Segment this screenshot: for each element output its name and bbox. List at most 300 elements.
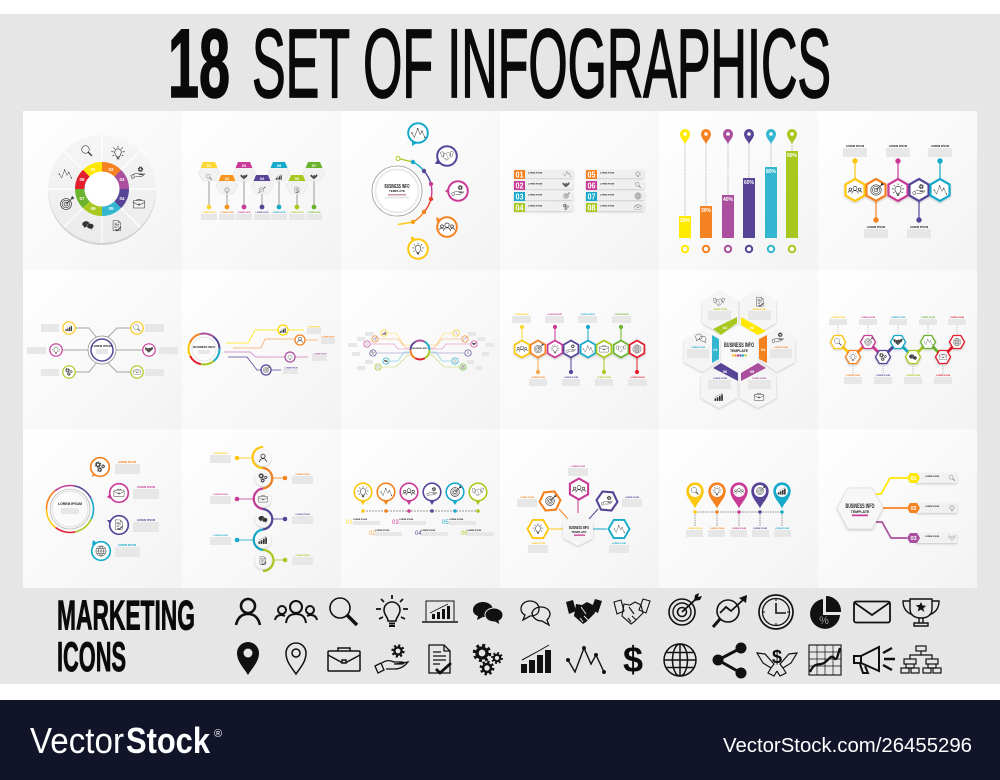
icon: hands with dollar [757, 647, 797, 676]
captions [514, 314, 645, 379]
icon: percent pie [810, 596, 841, 629]
ring numbers: 01 [90, 167, 96, 172]
text blocks [353, 521, 494, 536]
line dots [361, 509, 480, 513]
band numbers: 06 [723, 369, 728, 374]
band numbers: 03 [750, 325, 755, 330]
icon: filled chat [473, 602, 503, 625]
number badges [514, 170, 597, 212]
step numbers: 02 [369, 531, 376, 537]
panel: numbered list [500, 111, 659, 270]
panel: hexagon hub [500, 429, 659, 588]
bar values: 60% [744, 180, 755, 186]
text blocks [687, 311, 792, 389]
captions: LOREM IPSUM [688, 528, 702, 530]
centre title: BUSINESS INFO [724, 342, 754, 349]
icon: envelope [854, 602, 890, 622]
text blocks [517, 468, 642, 553]
list labels: LOREM IPSUM [528, 194, 542, 196]
captions: LOREM IPSUM [213, 453, 228, 455]
row labels: LOREM IPSUM [925, 506, 939, 508]
centre label: BUSINESS INFO [412, 348, 428, 350]
captions: LOREM IPSUM [753, 528, 767, 530]
panel: eight hexagon chain [500, 270, 659, 429]
icon: megaphone [854, 647, 895, 673]
captions: LOREM IPSUM [614, 314, 629, 316]
captions: LOREM IPSUM [867, 225, 885, 229]
bar values: 90% [787, 153, 798, 159]
captions: LOREM IPSUM [775, 528, 789, 530]
ring [188, 334, 220, 364]
centre title: TEMPLATE [730, 349, 749, 353]
list labels: LOREM IPSUM [600, 184, 614, 186]
centre circle [372, 166, 422, 216]
pin icons [691, 486, 786, 495]
captions: LOREM IPSUM [931, 144, 949, 148]
captions: LOREM IPSUM [936, 375, 950, 377]
footer logo [30, 720, 222, 761]
list labels [528, 172, 614, 208]
step numbers: 01 [346, 520, 353, 526]
captions: LOREM IPSUM [597, 377, 611, 379]
nodes [364, 330, 477, 370]
band numbers: 01 [713, 347, 718, 352]
centre circle: BUSINESS INFO [384, 184, 410, 190]
captions: LOREM IPSUM [691, 347, 705, 349]
zigzag links [838, 342, 957, 357]
axis dots [693, 510, 784, 514]
panel: bar chart [659, 111, 818, 270]
badge numbers: 07 [588, 192, 596, 202]
wheel base [48, 135, 156, 245]
list labels: LOREM IPSUM [600, 172, 614, 174]
row labels: LOREM IPSUM [925, 476, 939, 478]
satellites [50, 322, 155, 378]
badge numbers [910, 476, 917, 542]
ring text [58, 502, 82, 514]
rows [915, 473, 957, 543]
footer logo: Stock [126, 720, 211, 761]
bar values: 30% [701, 208, 712, 214]
outer hexagons [528, 478, 630, 538]
coloured bands [712, 317, 767, 381]
captions: LOREM IPSUM [861, 317, 875, 319]
centre circle: TEMPLATE [389, 189, 405, 193]
captions: LOREM IPSUM [625, 497, 639, 499]
ring numbers: 02 [108, 167, 114, 172]
captions: LOREM IPSUM [889, 144, 907, 148]
hexagon numbers [207, 163, 317, 181]
column captions: LOREM IPSUM [221, 212, 234, 214]
bubble captions: LOREM IPSUM [118, 543, 136, 547]
step labels: LOREM IPSUM [449, 519, 463, 521]
stem dots [520, 325, 639, 374]
stems [237, 458, 285, 560]
icon: handshake [566, 599, 602, 624]
icon: document check [429, 645, 451, 673]
captions: LOREM IPSUM [630, 377, 645, 379]
bar values: 40% [723, 197, 734, 203]
bubble captions: LOREM IPSUM [137, 518, 155, 522]
hexagon icons [206, 174, 318, 193]
title [168, 9, 831, 118]
captions: LOREM IPSUM [514, 314, 529, 316]
bubbles [91, 458, 128, 560]
badge numbers: 06 [588, 182, 596, 190]
number badges [907, 473, 920, 543]
captions: LOREM IPSUM [921, 317, 935, 319]
callout circles [354, 483, 487, 505]
ring numbers: 03 [119, 177, 125, 182]
badge numbers: 02 [516, 182, 524, 190]
hexagon numbers: 06 [295, 176, 300, 181]
title: 18 [168, 9, 230, 118]
hub [88, 336, 116, 364]
panel: circle with speech bubbles [23, 429, 182, 588]
captions [688, 528, 789, 530]
outer icons [533, 485, 625, 533]
captions: LOREM IPSUM [295, 474, 310, 476]
captions: LOREM IPSUM [752, 378, 766, 380]
ring numbers: 05 [108, 206, 114, 211]
badge numbers: 03 [910, 536, 917, 542]
captions [831, 317, 964, 377]
icon: gears [474, 645, 502, 674]
badge numbers: 03 [516, 192, 524, 202]
badge numbers: 01 [516, 170, 524, 180]
hexagon icons [848, 182, 947, 195]
ring numbers [79, 167, 125, 211]
row labels: LOREM IPSUM [925, 536, 939, 538]
icon: trophy [903, 599, 939, 626]
icon: light bulb [376, 595, 408, 626]
hexagon icons [834, 337, 961, 361]
text blocks [843, 148, 952, 238]
icon: filled pin [237, 642, 259, 675]
step labels: LOREM IPSUM [421, 530, 435, 532]
stems [209, 181, 314, 207]
nodes [261, 325, 305, 375]
badge numbers: 02 [910, 506, 917, 512]
column captions: LOREM IPSUM [308, 212, 321, 214]
ring numbers: 06 [90, 206, 96, 211]
bars [679, 151, 798, 238]
step numbers: 03 [392, 520, 399, 526]
captions: LOREM IPSUM [713, 309, 727, 311]
stem dots [852, 158, 943, 223]
stems [522, 327, 637, 372]
column captions: LOREM IPSUM [291, 212, 304, 214]
callout icons [358, 486, 484, 497]
dotted leaders [685, 143, 792, 216]
bubble icons [411, 128, 464, 254]
icon: outline pin [286, 643, 306, 674]
node icons [365, 331, 476, 369]
dots [235, 456, 287, 562]
footer logo: ® [214, 728, 222, 740]
band numbers: 02 [723, 325, 728, 330]
heading: marketing icons [57, 592, 195, 680]
captions: LOREM IPSUM [213, 535, 228, 537]
panel: circle with circuit lines [182, 270, 341, 429]
step labels: LOREM IPSUM [375, 530, 389, 532]
centre hexagon [563, 513, 593, 546]
step numbers: 04 [415, 531, 422, 537]
branches [875, 478, 907, 538]
hexagon icons [696, 297, 784, 401]
hexagon numbers: 02 [225, 176, 230, 181]
circles [255, 450, 271, 569]
hexagons [830, 336, 964, 363]
captions: LOREM IPSUM [580, 314, 595, 316]
dashed axis [695, 512, 782, 526]
column captions: LOREM IPSUM [256, 212, 269, 214]
icon: team [275, 601, 317, 623]
text blocks [686, 530, 791, 537]
bar values: 20% [680, 218, 691, 224]
centre title [724, 342, 754, 356]
hexagon numbers: 04 [260, 176, 265, 181]
captions: LOREM IPSUM [547, 314, 562, 316]
captions: LOREM IPSUM [531, 543, 545, 545]
captions: LOREM IPSUM [846, 375, 860, 377]
column captions: LOREM IPSUM [273, 212, 286, 214]
circle icons [258, 454, 268, 565]
list labels: LOREM IPSUM [600, 194, 614, 196]
band numbers [713, 325, 766, 374]
captions: LOREM IPSUM [213, 494, 228, 496]
column captions [203, 212, 321, 214]
panel: five hexagon chain [818, 111, 977, 270]
icon: briefcase [328, 648, 360, 671]
dots [207, 205, 316, 209]
text blocks [201, 214, 322, 220]
step numbers: 06 [461, 531, 468, 537]
bubble captions [118, 460, 155, 547]
captions: LOREM IPSUM [846, 144, 864, 148]
step numbers: 05 [442, 520, 449, 526]
wheel hole [85, 172, 119, 206]
panel: hub with six satellites [23, 270, 182, 429]
text blocks [348, 332, 494, 370]
captions: LOREM IPSUM [295, 514, 310, 516]
ring numbers: 04 [119, 196, 125, 201]
hexagons [845, 179, 950, 201]
wheel icons [59, 146, 145, 231]
icon: user [236, 599, 260, 625]
stems [855, 161, 940, 220]
icon: outline chat [521, 601, 550, 625]
colour ring [80, 167, 124, 211]
panel: hexagon with three branches [818, 429, 977, 588]
hexagons [515, 340, 644, 358]
step labels: LOREM IPSUM [399, 519, 413, 521]
captions: LOREM IPSUM [713, 378, 727, 380]
panel: pin timeline [659, 429, 818, 588]
bar values: 80% [766, 169, 777, 175]
dashed line [363, 510, 478, 512]
icon: clock [759, 595, 793, 629]
panel: arc with bubbles [341, 111, 500, 270]
step numbers [346, 520, 468, 537]
top pins [680, 129, 797, 144]
icon: globe [664, 644, 696, 676]
panel: segmented wheel [23, 111, 182, 270]
text blocks [27, 324, 178, 376]
coloured arc [398, 158, 432, 224]
node captions: LOREM IPSUM [314, 354, 327, 356]
step labels [353, 519, 481, 532]
column captions: LOREM IPSUM [238, 212, 251, 214]
large hexagon [837, 488, 883, 529]
captions: LOREM IPSUM [950, 317, 964, 319]
icon: search [330, 598, 357, 625]
captions [691, 309, 788, 380]
icon: growth magnifier [713, 595, 747, 627]
wiring [371, 333, 470, 367]
icon: percent pie: % [819, 615, 829, 627]
panel: capped hexagon columns [182, 111, 341, 270]
captions: LOREM IPSUM [531, 377, 545, 379]
bubble captions: LOREM IPSUM [137, 485, 155, 489]
badge numbers: 04 [516, 204, 524, 212]
panel: central ring with twelve nodes [341, 270, 500, 429]
icon: target [669, 593, 702, 625]
captions [520, 466, 639, 545]
captions: LOREM IPSUM [752, 309, 766, 311]
outer hexagons [684, 291, 795, 408]
ring numbers: 08 [79, 177, 85, 182]
captions: LOREM IPSUM [710, 528, 724, 530]
icon row 1 [236, 593, 939, 629]
text blocks [829, 319, 966, 384]
icon: zigzag line [567, 647, 605, 673]
node icons [263, 327, 303, 373]
heading: marketing icons: ICONS [57, 633, 126, 680]
connectors [550, 500, 607, 529]
node captions: LOREM IPSUM [322, 336, 335, 338]
text blocks [115, 464, 159, 557]
captions: LOREM IPSUM [831, 317, 845, 319]
heading: marketing icons: MARKETING [57, 592, 195, 638]
list labels: LOREM IPSUM [528, 206, 542, 208]
badge numbers: 08 [588, 204, 596, 212]
panel: six callout timeline [341, 429, 500, 588]
footer url: VectorStock.com/26455296 [723, 735, 972, 757]
ring text: BUSINESS INFO [193, 345, 216, 349]
list labels: LOREM IPSUM [528, 184, 542, 186]
serpentine curve [252, 447, 274, 571]
row labels [925, 476, 939, 538]
list labels: LOREM IPSUM [600, 206, 614, 208]
captions: LOREM IPSUM [906, 375, 920, 377]
bottom rings [682, 246, 795, 252]
icon: dollar: $ [623, 639, 643, 680]
icon: outline handshake [614, 599, 650, 624]
row icons [948, 475, 956, 540]
ring text: LOREM IPSUM [58, 502, 82, 506]
ring numbers: 07 [79, 196, 85, 201]
step labels: LOREM IPSUM [353, 519, 367, 521]
hexagon numbers: 07 [312, 163, 317, 168]
captions: LOREM IPSUM [564, 377, 578, 379]
bar values [680, 153, 798, 224]
icon: line chart grid [809, 645, 841, 675]
captions: LOREM IPSUM [774, 347, 788, 349]
footer logo: Vector [30, 720, 124, 761]
badge numbers: 01 [910, 476, 917, 482]
captions [846, 144, 949, 229]
node captions: LOREM IPSUM [308, 326, 321, 328]
hexagon numbers: 01 [207, 163, 212, 168]
list icons [562, 171, 641, 210]
circuit lines [224, 330, 318, 370]
captions: LOREM IPSUM [732, 528, 746, 530]
hexagon icons [517, 343, 641, 353]
icon row 2 [237, 639, 941, 680]
icon: hand with gear [375, 645, 408, 673]
centre ring [410, 340, 430, 360]
icon: share [712, 642, 746, 678]
satellite icons [52, 324, 153, 376]
hexagon numbers: 05 [277, 163, 282, 168]
badge numbers [516, 170, 596, 212]
list bars [514, 170, 644, 211]
footer bar [0, 700, 1000, 780]
list labels: LOREM IPSUM [528, 172, 542, 174]
pins [686, 482, 791, 508]
centre hexagon: BUSINESS INFO [569, 525, 589, 530]
node captions: LOREM IPSUM [285, 368, 298, 370]
dotted stems [838, 325, 957, 375]
captions: LOREM IPSUM [910, 225, 928, 229]
large hexagon: BUSINESS INFO [846, 503, 874, 510]
panel: zigzag hexagon chain [818, 270, 977, 429]
icon: org chart [901, 646, 941, 673]
ring text [193, 345, 216, 354]
pin faces [689, 485, 788, 497]
text blocks [210, 455, 313, 565]
step labels: LOREM IPSUM [467, 530, 481, 532]
large hexagon: TEMPLATE [851, 510, 870, 514]
panel: hexagon flower [659, 270, 818, 429]
centre hexagon: TEMPLATE [572, 530, 587, 534]
captions: LOREM IPSUM [571, 466, 585, 468]
captions: LOREM IPSUM [891, 317, 905, 319]
captions: LOREM IPSUM [520, 497, 534, 499]
icon: rising bars [521, 645, 551, 673]
hexagon numbers: 03 [242, 163, 247, 168]
hexagons [198, 162, 325, 194]
arc nodes [396, 156, 433, 224]
badge numbers: 05 [588, 170, 596, 180]
band numbers: 04 [761, 347, 766, 352]
text blocks [283, 328, 335, 374]
bubble captions: LOREM IPSUM [118, 460, 136, 464]
bubble icons [95, 462, 124, 556]
icon: laptop chart [422, 601, 458, 622]
bubbles [408, 123, 468, 259]
panel: serpentine timeline [182, 429, 341, 588]
captions: LOREM IPSUM [295, 555, 310, 557]
hub: LOREM IPSUM [92, 344, 113, 348]
node captions [285, 326, 335, 370]
captions: LOREM IPSUM [612, 543, 626, 545]
captions: LOREM IPSUM [876, 375, 890, 377]
large ring [46, 486, 94, 532]
column captions: LOREM IPSUM [203, 212, 216, 214]
text blocks [512, 316, 647, 386]
